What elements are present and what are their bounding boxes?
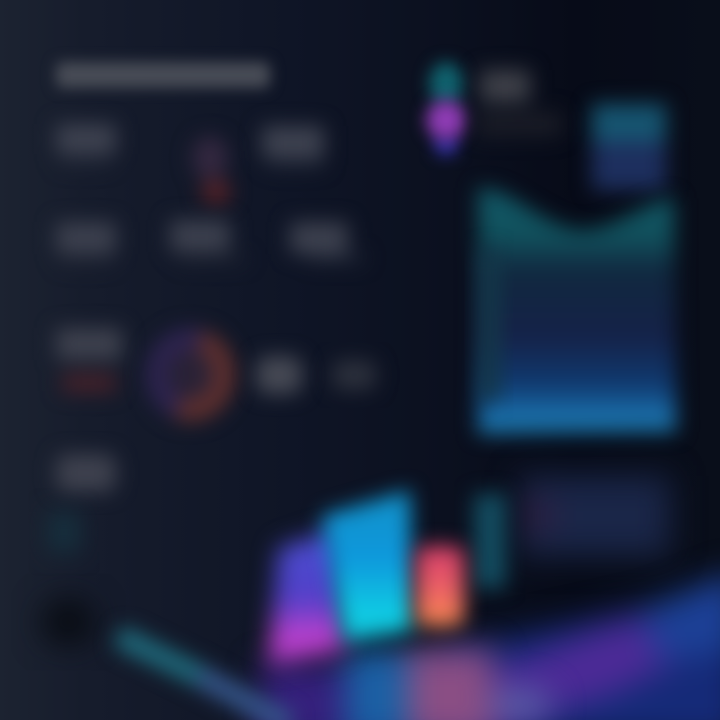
3D bar: cyan <box>322 490 412 642</box>
area chart panel <box>478 188 676 434</box>
area chart left edge <box>478 250 500 400</box>
stat block: row two centre <box>170 220 246 262</box>
small teal mark <box>48 512 80 552</box>
floor reflection <box>260 650 552 720</box>
stat block: row two left <box>56 222 116 264</box>
floor surface <box>270 570 720 720</box>
3D bar: purple <box>268 528 345 666</box>
stat block: row two right <box>290 222 364 262</box>
title <box>56 62 270 88</box>
teal vertical bar <box>474 494 506 588</box>
stat block: row three left <box>56 328 122 392</box>
3D bar: orange <box>416 546 464 626</box>
icon: purple circle <box>426 100 466 156</box>
value label: right <box>332 360 376 390</box>
value label: centre <box>256 356 302 394</box>
legend text <box>476 70 562 136</box>
panel: lower dark chart <box>520 476 670 556</box>
stat block: top right <box>262 126 324 167</box>
icon: teal circle <box>429 62 463 106</box>
stat block: top left <box>56 124 116 165</box>
teal diagonal line <box>118 636 290 720</box>
stat block: row four <box>56 454 116 492</box>
panel: small blue bar <box>592 104 666 190</box>
dark lower left shade <box>42 600 94 644</box>
icon: top centre gauge <box>192 136 231 204</box>
donut chart <box>157 339 224 410</box>
